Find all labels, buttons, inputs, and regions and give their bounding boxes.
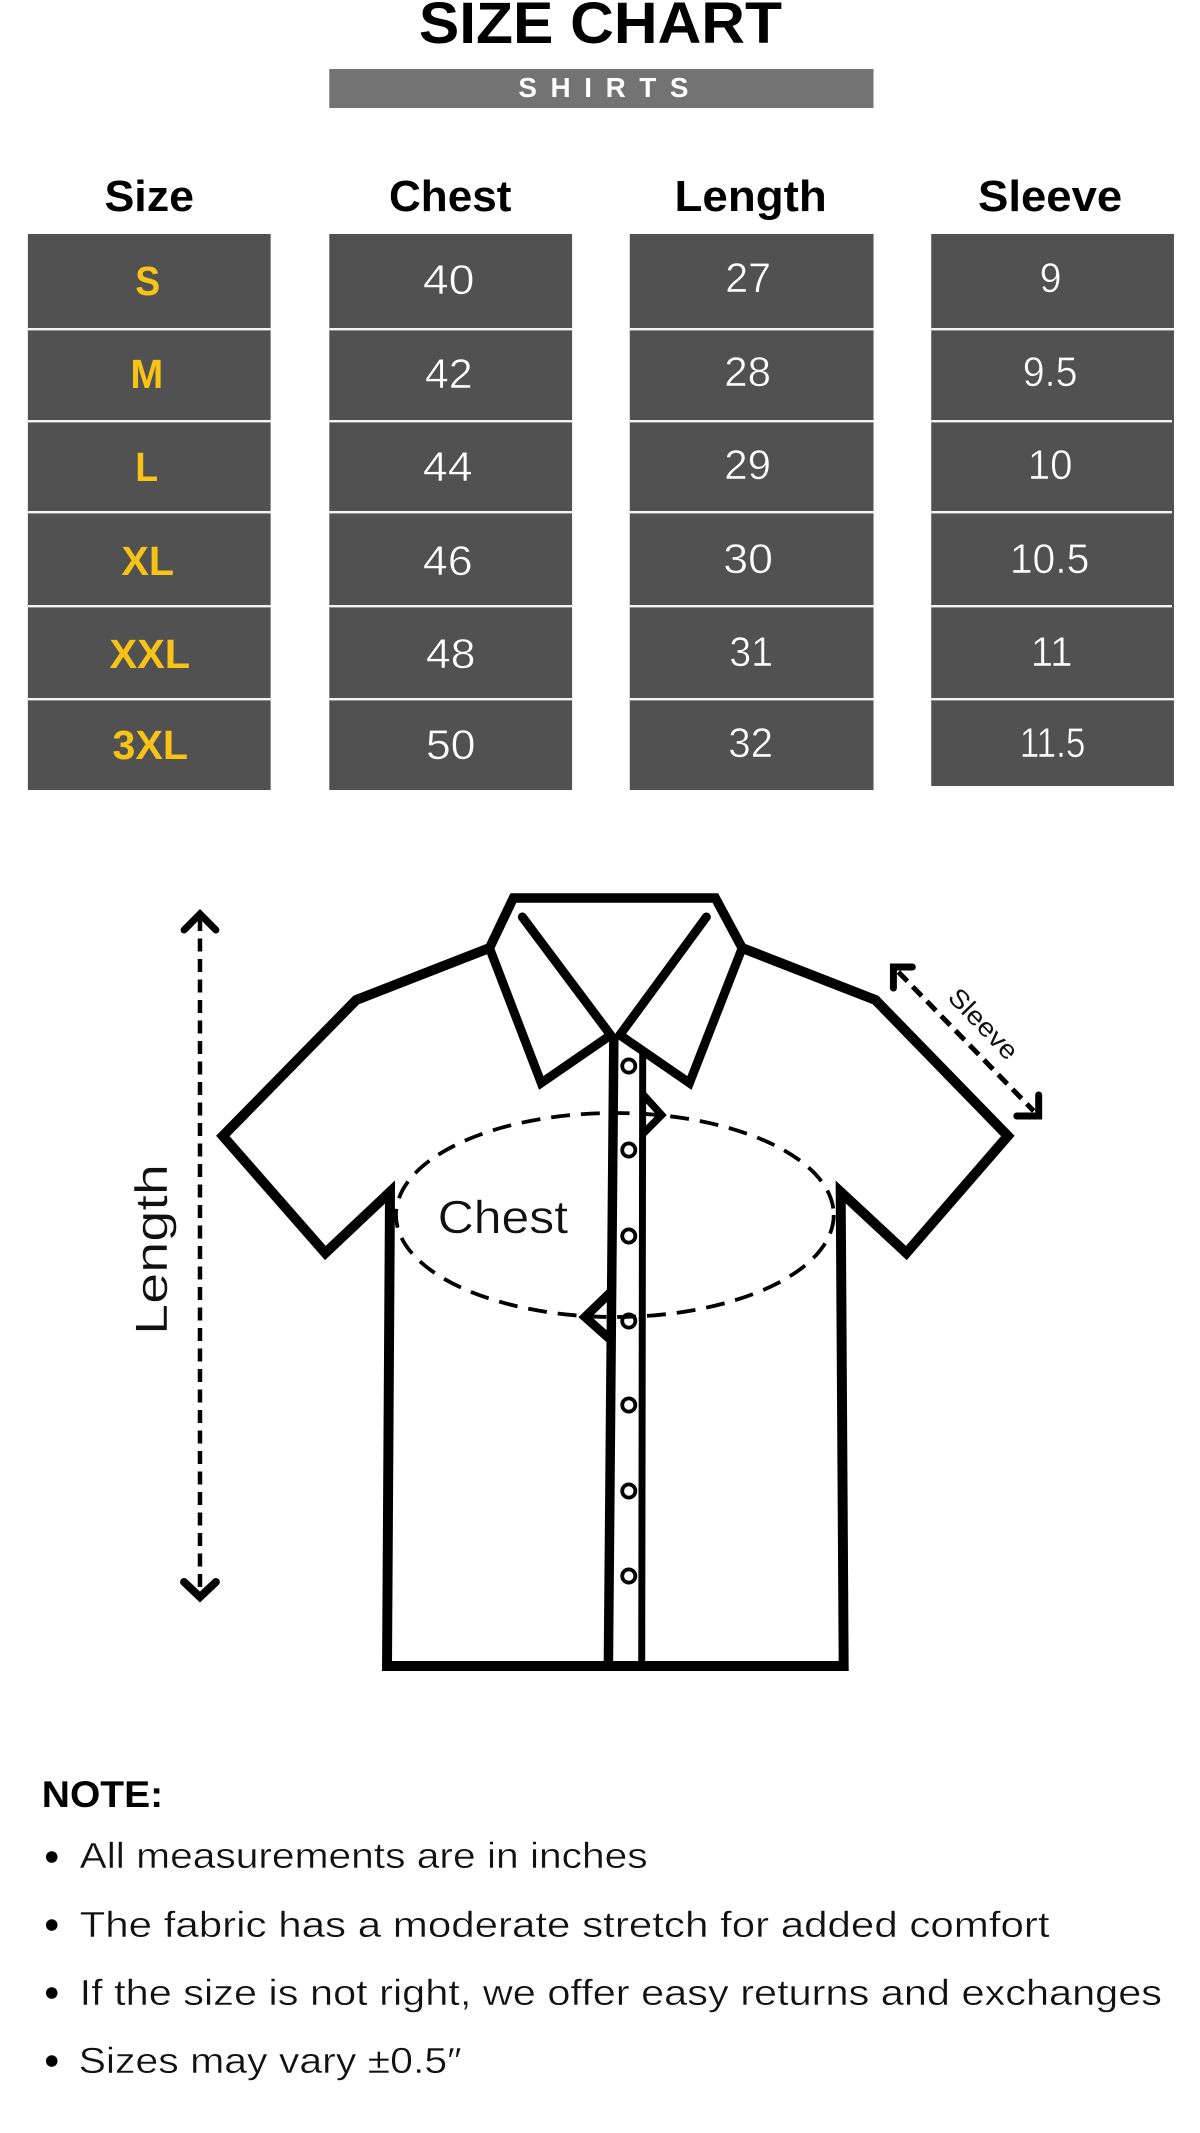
table column: sleeve: 9.5 — [1023, 348, 1077, 395]
table column: sleeve: 11 — [1031, 628, 1073, 675]
column heading: sleeve: Sleeve — [978, 172, 1122, 221]
subtitle banner: shirts: SHIRTS — [518, 72, 688, 103]
table column: size: L — [135, 444, 158, 490]
table column: sleeve: 9 — [1040, 254, 1062, 301]
table column: size: M — [130, 351, 163, 397]
table column: length: 32 — [728, 719, 773, 766]
notes section — [42, 1774, 1162, 2081]
column heading: chest: Chest — [389, 172, 512, 221]
label: sleeve: Sleeve — [942, 983, 1023, 1066]
table column: chest: 50 — [426, 721, 476, 768]
note 1: All measurements are in inches — [80, 1836, 648, 1876]
table column: chest: 46 — [423, 537, 473, 584]
note 2: The fabric has a moderate stretch for added comfort — [80, 1905, 1050, 1945]
table column: chest: 42 — [425, 350, 473, 397]
shirt diagram — [223, 898, 1008, 1666]
sleeve arrow — [893, 967, 1039, 1116]
table column: chest: 40 — [423, 256, 475, 303]
table column: chest: 48 — [426, 630, 476, 677]
table column: length: 27 — [725, 254, 771, 301]
notes heading: NOTE: — [42, 1774, 163, 1815]
table column: length: 28 — [724, 348, 771, 395]
table column: sleeve: 11.5 — [1020, 719, 1085, 766]
table column: size — [28, 172, 271, 790]
note 3: If the size is not right, we offer easy returns and exchanges — [80, 1973, 1162, 2013]
note 4: Sizes may vary ±0.5″ — [79, 2041, 462, 2081]
arrow: chest top — [642, 1093, 662, 1135]
collar — [489, 898, 742, 1083]
table column: size: XXL — [109, 631, 190, 677]
table column: length: 31 — [729, 628, 773, 675]
table column: size: 3XL — [112, 722, 188, 768]
table column: size: S — [135, 258, 160, 304]
table column: chest: 44 — [423, 443, 473, 490]
label: length: Length — [125, 1164, 177, 1335]
button placket — [608, 1036, 643, 1666]
arrow: chest bottom — [585, 1292, 611, 1340]
table column: size: XL — [121, 538, 174, 584]
table column: chest — [329, 172, 572, 790]
table column: length — [630, 172, 874, 790]
shirt outline — [223, 948, 1008, 1666]
column heading: size: Size — [104, 172, 194, 221]
chest measurement ellipse — [396, 1093, 834, 1340]
table column: sleeve — [931, 172, 1174, 786]
buttons — [622, 1059, 635, 1583]
table column: length: 29 — [724, 441, 771, 488]
length arrow — [184, 914, 216, 1597]
column heading: length: Length — [675, 172, 827, 221]
table column: length: 30 — [723, 535, 773, 582]
subtitle banner: shirts — [329, 69, 874, 108]
table column: sleeve: 10 — [1028, 441, 1073, 488]
table column: sleeve: 10.5 — [1010, 535, 1089, 582]
label: chest: Chest — [438, 1191, 568, 1243]
